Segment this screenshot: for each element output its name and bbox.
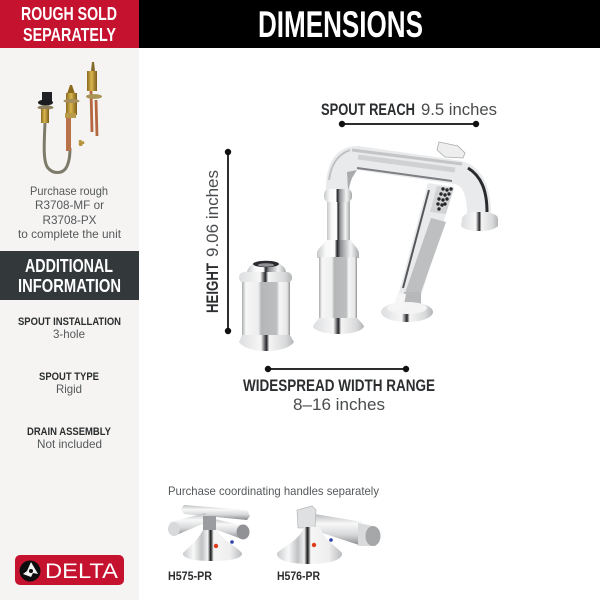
image: handle h576-pr [277,506,380,564]
spec: drain assembly [27,426,112,451]
heading: additional information: ADDITIONAL [25,255,113,276]
label: h575-pr: H575-PR [168,569,212,583]
spout body [327,200,350,242]
dimension: widespread width range: WIDESPREAD WIDTH RANGE [243,376,435,395]
spec: spout installation [18,316,121,341]
text: purchase rough: R3708-PX [42,213,96,227]
banner: rough sold separately: ROUGH SOLD [21,4,117,24]
heading: additional information: INFORMATION [18,275,121,296]
dimension: height [203,149,231,334]
text: purchase coordinating handles: Purchase coordinating handles separately [168,484,379,498]
banner: rough sold separately: SEPARATELY [23,25,116,45]
dimension: spout reach [321,100,497,127]
title: dimensions: DIMENSIONS [258,4,423,45]
dimension: spout reach: 9.5 inches [421,100,497,119]
spec: spout type: Rigid [56,382,82,396]
spec: spout installation: SPOUT INSTALLATION [18,316,121,328]
image: rough valve assembly [38,62,102,172]
handle valve body [247,261,286,272]
logo: delta [15,555,124,585]
dimension: height: 9.06 inches [203,170,222,257]
title: dimensions [139,0,600,48]
spec: drain assembly: DRAIN ASSEMBLY [27,426,112,438]
spec: spout installation: 3-hole [53,327,85,341]
heading: additional information [0,251,139,300]
logo: delta: DELTA [45,560,118,583]
image: faucet [239,142,498,351]
image: handle h575-pr [168,505,250,561]
text: purchase rough: R3708-MF or [35,198,104,212]
text: purchase rough: to complete the unit [18,227,122,241]
dimension: height: HEIGHT [203,263,222,313]
spout [338,158,479,214]
panel: left sidebar [0,0,139,600]
hand shower holder cap [437,142,465,158]
spout tip [461,212,498,231]
spec: drain assembly: Not included [37,437,102,451]
hand shower [381,183,454,322]
text: purchase rough [18,184,122,241]
dimension: widespread width range [243,366,435,414]
text: purchase rough: Purchase rough [30,184,108,198]
dimension: spout reach: SPOUT REACH [321,100,415,119]
spec: spout type [39,371,99,396]
dimension: widespread width range: 8–16 inches [293,395,385,414]
label: h576-pr: H576-PR [277,569,320,583]
banner: rough sold separately [0,0,139,48]
spec: spout type: SPOUT TYPE [39,371,99,383]
